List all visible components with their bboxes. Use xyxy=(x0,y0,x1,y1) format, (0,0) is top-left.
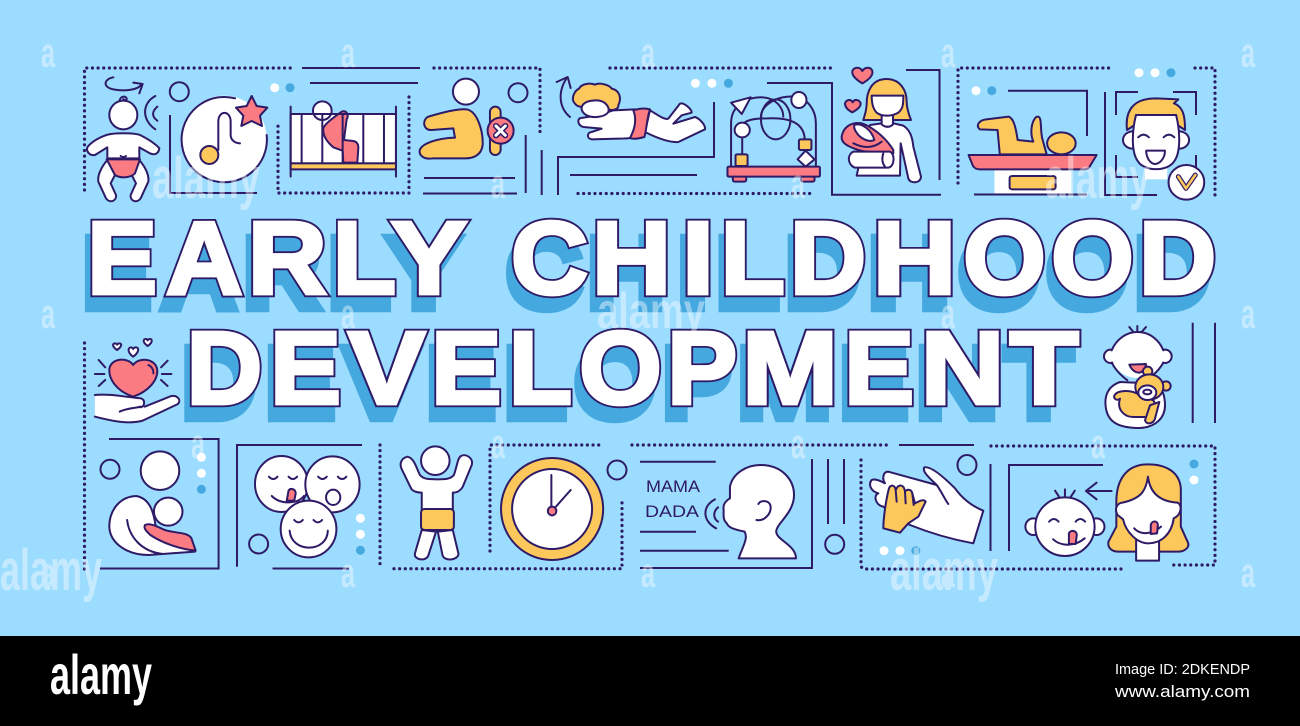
title: Early Childhood Development: P xyxy=(667,311,737,426)
title: Early Childhood Development: O xyxy=(579,311,662,426)
icon: baby copying adult sticking out tongue xyxy=(1025,464,1188,561)
title: Early Childhood Development: H xyxy=(873,201,956,316)
watermarks: alamy xyxy=(0,538,102,603)
watermarks: a xyxy=(641,29,655,76)
title: Early Childhood Development: D xyxy=(187,311,262,426)
title: Early Childhood Development: L xyxy=(503,325,567,440)
title: Early Childhood Development: O xyxy=(579,311,662,426)
watermarks: a xyxy=(341,29,355,76)
title: Early Childhood Development: V xyxy=(348,311,425,426)
icon: parent holding child xyxy=(109,451,196,555)
watermarks: a xyxy=(41,549,55,596)
title: Early Childhood Development: H xyxy=(873,201,956,316)
title: Early Childhood Development: L xyxy=(333,200,396,315)
watermarks: a xyxy=(1241,549,1255,596)
title: Early Childhood Development: L xyxy=(509,310,572,425)
title: Early Childhood Development: H xyxy=(592,200,671,316)
title: Early Childhood Development: R xyxy=(248,201,327,316)
icon: prone baby lifting head xyxy=(557,77,705,142)
title: Early Childhood Development: L xyxy=(327,215,391,330)
title: Early Childhood Development: D xyxy=(790,201,866,316)
title: Early Childhood Development: O xyxy=(963,201,1046,316)
title: Early Childhood Development: I xyxy=(682,201,714,316)
title: Early Childhood Development: Y xyxy=(391,200,467,315)
watermarks: a xyxy=(641,549,655,596)
watermarks: a xyxy=(1241,29,1255,76)
icon: baby standing in crib xyxy=(291,101,396,177)
icon: clock xyxy=(501,458,603,560)
title: Early Childhood Development: O xyxy=(1046,216,1128,331)
title: Early Childhood Development: R xyxy=(248,201,327,316)
title: Early Childhood Development: C xyxy=(511,201,588,316)
text: MAMA DADA: MAMA xyxy=(646,477,701,496)
footer credits xyxy=(1114,661,1250,701)
icon: baby hugging teddy bear xyxy=(1104,326,1172,428)
watermarks: a xyxy=(941,290,955,337)
title: Early Childhood Development: E xyxy=(839,326,908,441)
title: Early Childhood Development: I xyxy=(682,201,714,316)
watermarks: a xyxy=(341,290,355,337)
title: Early Childhood Development: A xyxy=(166,201,243,316)
icon: activity toy xyxy=(727,92,820,182)
icon: mother holding baby with hearts xyxy=(842,68,921,182)
title: Early Childhood Development: I xyxy=(676,216,709,331)
title: Early Childhood Development: C xyxy=(506,216,583,331)
title: Early Childhood Development: A xyxy=(166,201,243,316)
title: Early Childhood Development: E xyxy=(844,311,914,426)
rings xyxy=(100,82,976,554)
title: Early Childhood Development: O xyxy=(958,216,1040,331)
title: Early Childhood Development: L xyxy=(509,310,572,425)
title: Early Childhood Development: M xyxy=(742,311,838,426)
icon: hand holding heart xyxy=(95,339,179,422)
text: MAMA DADA xyxy=(645,477,701,521)
title: Early Childhood Development: E xyxy=(431,311,501,426)
footer logo: alamy: alamy xyxy=(50,643,152,706)
title: Early Childhood Development: H xyxy=(592,200,671,316)
dots xyxy=(197,68,1198,555)
title: Early Childhood Development: R xyxy=(242,216,321,331)
title: Early Childhood Development: M xyxy=(737,326,832,441)
title: Early Childhood Development: D xyxy=(784,216,861,331)
title: Early Childhood Development: O xyxy=(1051,201,1134,316)
icon: adult hand and baby hand xyxy=(870,467,983,543)
watermarks: a xyxy=(791,420,805,467)
title: Early Childhood Development: D xyxy=(187,311,262,426)
title: Early Childhood Development: O xyxy=(963,201,1046,316)
title: Early Childhood Development: O xyxy=(574,326,656,441)
title: Early Childhood Development: P xyxy=(662,326,731,441)
title: Early Childhood Development: E xyxy=(87,201,157,316)
watermarks: alamy xyxy=(890,538,998,603)
title: Early Childhood Development: H xyxy=(867,216,951,331)
title: Early Childhood Development xyxy=(82,200,1216,441)
title: Early Childhood Development: D xyxy=(1139,201,1216,316)
title: Early Childhood Development: Y xyxy=(391,200,467,315)
title: Early Childhood Development: T xyxy=(1010,310,1078,425)
watermarks xyxy=(0,29,1255,603)
watermarks: a xyxy=(491,160,505,207)
watermarks: a xyxy=(341,549,355,596)
icon: sitting baby with pillow xyxy=(420,79,514,159)
watermarks: a xyxy=(41,290,55,337)
watermarks: a xyxy=(1241,290,1255,337)
title: Early Childhood Development: E xyxy=(87,201,157,316)
title: Early Childhood Development: E xyxy=(82,216,151,331)
text: MAMA DADA: DADA xyxy=(645,502,700,521)
watermarks: alamy xyxy=(1045,146,1150,211)
footer credits: www.alamy.com xyxy=(1114,682,1250,701)
title: Early Childhood Development: N xyxy=(921,311,1004,426)
watermarks: a xyxy=(941,29,955,76)
title: Early Childhood Development: T xyxy=(1010,310,1078,425)
icon: baby on changing table xyxy=(969,117,1097,193)
title: Early Childhood Development: L xyxy=(333,200,396,315)
title: Early Childhood Development: E xyxy=(431,311,501,426)
title: Early Childhood Development: V xyxy=(343,326,420,441)
icon: music note with star xyxy=(181,96,267,182)
title: Early Childhood Development: T xyxy=(1004,325,1073,440)
icon: smiling adult face with check badge xyxy=(1123,98,1204,200)
watermarks: a xyxy=(191,420,205,467)
watermarks: a xyxy=(491,420,505,467)
icon: baby turning head xyxy=(87,77,159,201)
title: Early Childhood Development: M xyxy=(742,311,838,426)
title: Early Childhood Development: Y xyxy=(386,215,461,330)
title: Early Childhood Development: V xyxy=(348,311,425,426)
title: Early Childhood Development: E xyxy=(270,311,341,426)
title: Early Childhood Development: D xyxy=(790,201,866,316)
icon: baby head speaking xyxy=(705,465,796,558)
title: Early Childhood Development: E xyxy=(426,326,496,441)
watermarks: a xyxy=(41,29,55,76)
title: Early Childhood Development: E xyxy=(844,311,914,426)
title: Early Childhood Development: D xyxy=(1139,201,1216,316)
title: Early Childhood Development: H xyxy=(586,215,666,331)
title: Early Childhood Development: D xyxy=(181,326,257,441)
watermarks: a xyxy=(791,160,805,207)
title: Early Childhood Development: D xyxy=(1134,216,1211,331)
title: Early Childhood Development: C xyxy=(511,201,588,316)
watermarks: alamy xyxy=(597,283,705,339)
title: Early Childhood Development: E xyxy=(270,311,341,426)
title: Early Childhood Development: N xyxy=(915,326,999,441)
watermarks: a xyxy=(941,549,955,596)
watermarks: a xyxy=(1091,420,1105,467)
title: Early Childhood Development: L xyxy=(721,201,785,316)
icon: child raising arms xyxy=(401,446,472,560)
title: Early Childhood Development: O xyxy=(1051,201,1134,316)
title: Early Childhood Development: E xyxy=(265,326,335,441)
footer credits: Image ID: 2DKENDP xyxy=(1115,661,1250,678)
icon: three baby faces xyxy=(255,456,360,557)
watermarks: alamy xyxy=(152,146,260,211)
title: Early Childhood Development: N xyxy=(921,311,1004,426)
title: Early Childhood Development: P xyxy=(667,311,737,426)
title: Early Childhood Development: L xyxy=(715,216,779,331)
title: Early Childhood Development: L xyxy=(721,201,785,316)
title: Early Childhood Development: A xyxy=(160,216,237,331)
